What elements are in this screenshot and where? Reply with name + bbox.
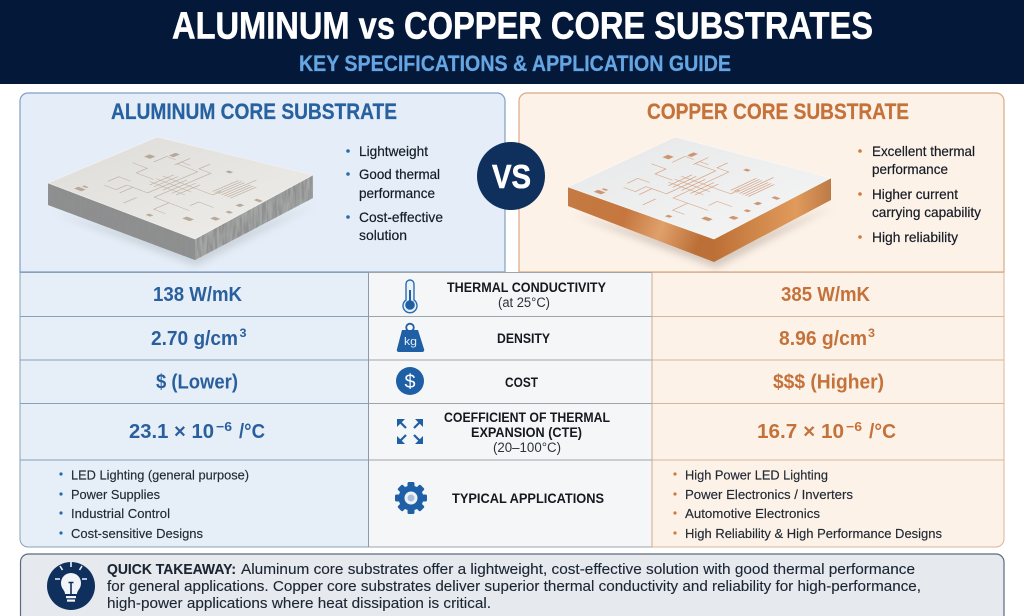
row: thermal conductivity: (at 25°C) — [498, 295, 550, 310]
row: thermal conductivity: THERMAL CONDUCTIVITY — [447, 280, 606, 295]
aluminum board image — [48, 137, 316, 266]
row: coefficient of thermal expansion: (20–100°C) — [493, 440, 561, 455]
row: density: 3 — [868, 326, 875, 340]
copper applications: Power Electronics / Inverters — [685, 487, 853, 502]
aluminum bullets: Cost-effective — [359, 209, 443, 225]
VS badge: VS — [492, 158, 531, 195]
row: coefficient of thermal expansion: −6 — [846, 419, 862, 434]
subtitle: KEY SPECIFICATIONS & APPLICATION GUIDE — [299, 51, 731, 76]
copper applications: Automotive Electronics — [685, 506, 820, 521]
row: coefficient of thermal expansion: COEFFICIENT OF THERMAL — [444, 410, 610, 425]
aluminum bullets: solution — [359, 227, 407, 243]
copper bullets: High reliability — [872, 229, 958, 245]
takeaway text: QUICK TAKEAWAY: — [107, 561, 236, 578]
row: coefficient of thermal expansion: 23.1 × 10 — [129, 421, 214, 443]
aluminum applications: Cost-sensitive Designs — [71, 526, 203, 541]
row: typical applications: TYPICAL APPLICATIONS — [452, 491, 604, 506]
row: density: 3 — [240, 326, 247, 340]
aluminum bullets: performance — [359, 185, 435, 201]
row: cost: $ (Lower) — [156, 372, 238, 394]
row: density: DENSITY — [497, 331, 550, 346]
copper bullets: Excellent thermal — [872, 143, 975, 159]
copper bullets: carrying capability — [872, 204, 981, 220]
icon: weight — [397, 324, 424, 352]
copper bullets: Higher current — [872, 186, 958, 202]
takeaway text — [107, 561, 921, 612]
row: typical applications — [59, 468, 942, 541]
copper applications: High Power LED Lighting — [685, 468, 828, 482]
icon: thermometer — [403, 280, 417, 313]
row: coefficient of thermal expansion — [129, 410, 896, 455]
copper board image — [568, 137, 834, 268]
copper bullets: performance — [872, 161, 948, 177]
copper applications — [673, 468, 942, 541]
aluminum applications — [59, 468, 249, 541]
icon: light bulb — [47, 562, 95, 610]
row: coefficient of thermal expansion: /°C — [869, 421, 896, 443]
header band — [0, 0, 1024, 84]
icon: gear — [395, 482, 427, 514]
aluminum applications: LED Lighting (general purpose) — [71, 468, 249, 482]
aluminum bullets — [346, 143, 443, 243]
icon: expansion arrows — [397, 419, 423, 444]
aluminum bullets: Good thermal — [359, 166, 440, 182]
title: ALUMINUM vs COPPER CORE SUBSTRATES — [172, 6, 873, 48]
copper bullets — [858, 143, 981, 245]
aluminum bullets: Lightweight — [359, 143, 428, 159]
row: cost: COST — [505, 375, 539, 390]
row: thermal conductivity: 138 W/mK — [153, 284, 243, 306]
copper heading: COPPER CORE SUBSTRATE — [647, 99, 909, 124]
VS badge — [477, 142, 545, 210]
row: density — [151, 324, 875, 352]
row: thermal conductivity: 385 W/mK — [781, 284, 871, 306]
aluminum applications: Industrial Control — [71, 506, 170, 521]
copper applications: High Reliability & High Performance Designs — [685, 526, 942, 541]
panel: copper core substrate — [519, 93, 1004, 272]
row: coefficient of thermal expansion: −6 — [216, 419, 232, 434]
row: thermal conductivity — [153, 280, 871, 313]
icon: dollar — [396, 367, 424, 395]
panel: aluminum core substrate — [20, 93, 505, 272]
row: coefficient of thermal expansion: EXPANSION (CTE) — [471, 425, 582, 440]
row: cost — [156, 367, 884, 395]
takeaway text: for general applications. Copper core substrates deliver superior thermal conductivity and reliability for high-performance, — [107, 578, 921, 595]
row: density: 2.70 g/cm — [151, 328, 238, 350]
callout: quick takeaway — [20, 554, 1004, 616]
takeaway text: Aluminum core substrates offer a lightweight, cost-effective solution with good thermal performance — [241, 561, 915, 578]
comparison table — [20, 272, 1004, 547]
aluminum heading: ALUMINUM CORE SUBSTRATE — [111, 99, 397, 124]
icon: weight: kg — [404, 336, 417, 348]
icon: dollar: $ — [404, 372, 416, 393]
row: coefficient of thermal expansion: /°C — [239, 421, 265, 443]
row: density: 8.96 g/cm — [779, 328, 867, 350]
row: cost: $$$ (Higher) — [773, 372, 884, 394]
takeaway text: high-power applications where heat dissipation is critical. — [107, 595, 491, 612]
aluminum applications: Power Supplies — [71, 487, 160, 502]
row: coefficient of thermal expansion: 16.7 × 10 — [757, 421, 844, 443]
